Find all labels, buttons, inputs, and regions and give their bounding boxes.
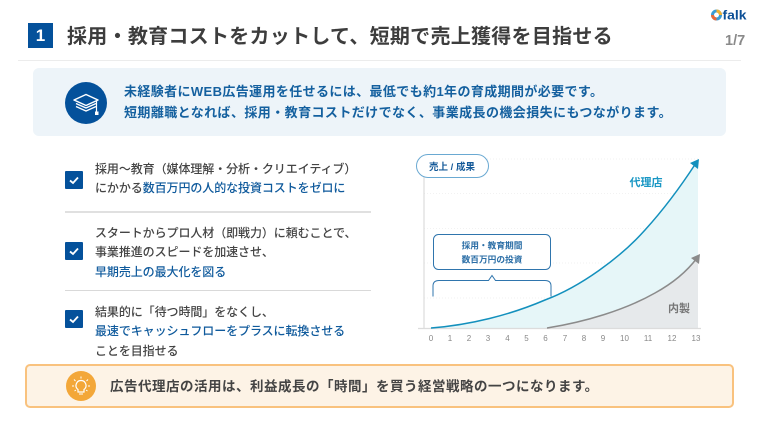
in-house area	[547, 256, 698, 328]
conclusion text: 広告代理店の活用は、利益成長の「時間」を買う経営戦略の一つになります。	[110, 379, 599, 394]
icon: checkbox	[65, 171, 83, 189]
item 2 text: 早期売上の最大化を図る	[95, 265, 226, 279]
x axis labels: 7	[563, 334, 568, 343]
x axis labels	[429, 334, 701, 343]
icon: graduation cap	[65, 82, 107, 124]
page number: 1/7	[725, 33, 745, 49]
x axis labels: 10	[620, 334, 629, 343]
item 1 text	[95, 162, 356, 195]
x axis labels: 5	[524, 334, 529, 343]
item 3 text: 最速でキャッシュフローをプラスに転換させる	[95, 324, 345, 338]
panel: conclusion callout	[25, 364, 734, 408]
item 2 text	[95, 226, 356, 279]
item 3 text	[95, 305, 345, 358]
item 1 text: 採用〜教育（媒体理解・分析・クリエイティブ）	[95, 162, 356, 176]
icon: checkbox	[65, 310, 83, 328]
agency area	[431, 160, 698, 328]
x axis labels: 11	[644, 334, 653, 343]
x axis labels: 0	[429, 334, 434, 343]
item 3 text: 結果的に「待つ時間」をなくし、	[95, 305, 274, 319]
intro text: 未経験者にWEB広告運用を任せるには、最低でも約1年の育成期間が必要です。	[124, 84, 603, 99]
intro text	[124, 84, 672, 120]
callout: investment period	[434, 234, 550, 270]
section number badge	[28, 23, 53, 48]
x axis labels: 4	[505, 334, 510, 343]
logo: falk	[711, 8, 747, 22]
x axis labels: 12	[668, 334, 677, 343]
icon: light bulb	[66, 371, 96, 401]
x axis labels: 9	[601, 334, 606, 343]
item 1 text: にかかる数百万円の人的な投資コストをゼロに	[95, 181, 345, 195]
header divider	[18, 60, 741, 61]
callout: investment period: 数百万円の投資	[462, 254, 523, 264]
in-house label: 内製	[668, 301, 690, 315]
title: 採用・教育コストをカットして、短期で売上獲得を目指せる	[67, 26, 613, 48]
x axis labels: 1	[448, 334, 453, 343]
item 2 text: スタートからプロ人材（即戦力）に頼むことで、	[95, 226, 356, 240]
item 2 text: 事業推進のスピードを加速させ、	[95, 245, 274, 259]
x axis labels: 3	[486, 334, 491, 343]
axes	[418, 177, 701, 329]
in-house curve	[547, 254, 700, 328]
callout: investment period: 採用・教育期間	[462, 240, 523, 250]
chart grid lines	[424, 159, 698, 298]
item 2	[65, 211, 371, 289]
intro text: 短期離職となれば、採用・教育コストだけでなく、事業成長の機会損失にもつながります。	[124, 104, 672, 120]
bracket	[433, 276, 551, 296]
y axis label: 売上 / 成果	[429, 161, 475, 173]
agency label: 代理店	[630, 176, 662, 189]
x axis labels: 13	[692, 334, 701, 343]
panel: benefit list	[65, 162, 371, 358]
x axis labels: 6	[543, 334, 548, 343]
item 3	[65, 290, 371, 360]
item 3 text: ことを目指せる	[95, 344, 178, 358]
x axis labels: 8	[582, 334, 587, 343]
panel: intro message	[33, 68, 726, 136]
item 1	[65, 162, 356, 195]
icon: checkbox	[65, 242, 83, 260]
x axis labels: 2	[467, 334, 472, 343]
section number badge: 1	[36, 26, 45, 45]
y axis label	[416, 154, 488, 178]
agency curve	[431, 159, 699, 328]
chart: revenue growth curves	[416, 154, 701, 343]
